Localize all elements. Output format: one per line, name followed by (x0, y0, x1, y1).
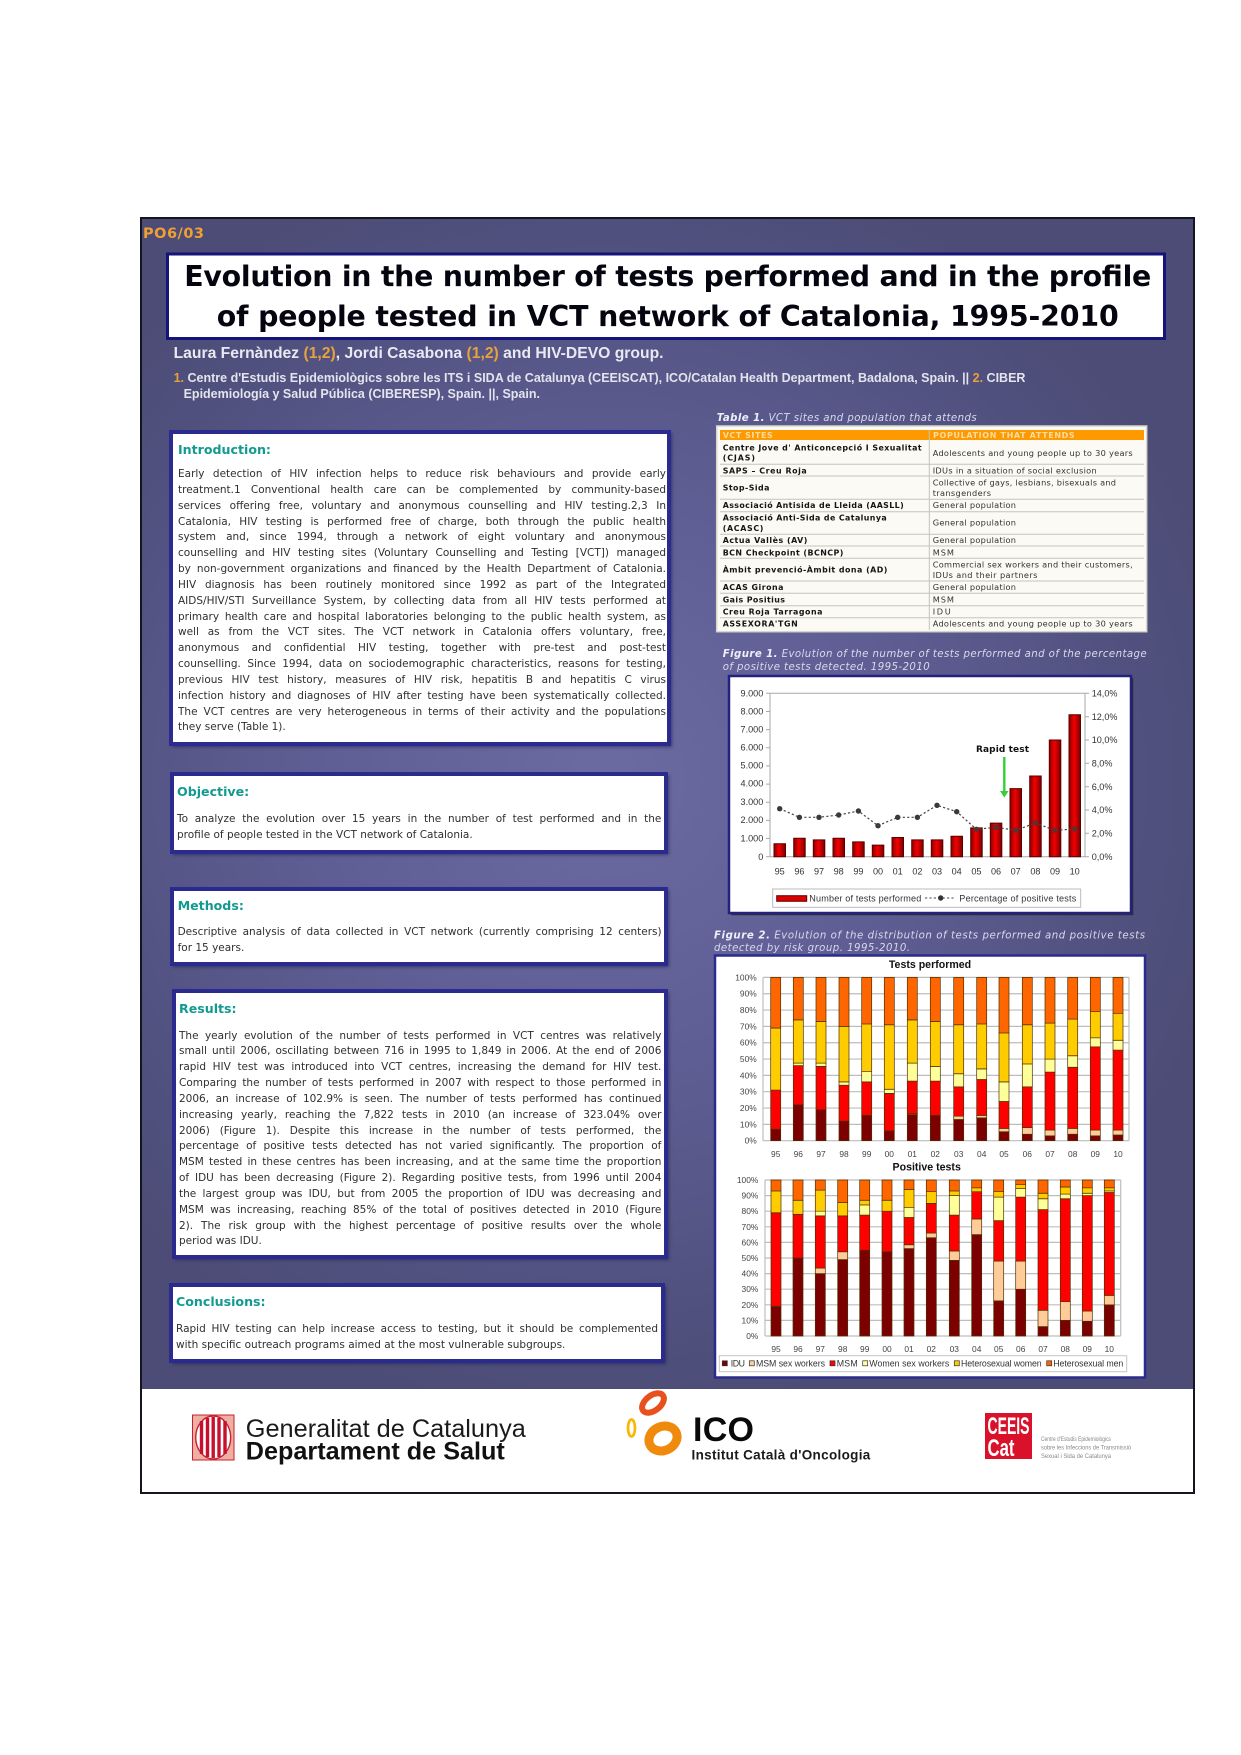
panel: conclusions (170, 1284, 664, 1362)
chart: positive tests: 09 (1083, 1344, 1092, 1354)
panel: methods (171, 888, 667, 965)
chart: tests performed: 80% (740, 1005, 757, 1015)
table rows: MSM (933, 594, 954, 604)
text: introduction body: primary health care and hospital laboratories belonging to the public health system, as (178, 611, 666, 623)
heading: results: Results: (179, 1001, 237, 1016)
title: Evolution in the number of tests performed and in the profile (184, 260, 1151, 293)
chart title: tests performed: Tests performed (889, 959, 971, 971)
chart: positive tests: 01 (904, 1344, 914, 1354)
logo: CEEIS Cat (985, 1413, 1132, 1462)
text: results body: percentage of positive tests detected has not varied significantly. The proportion of (179, 1140, 661, 1152)
right axis labels (1092, 688, 1117, 862)
figure 2 caption: Figure 2. Evolution of the distribution of tests performed and positive tests (714, 930, 1146, 942)
text: introduction body: by non-government organizations and financed by the Health Department of Catalonia. (178, 563, 666, 575)
left axis labels: 9.000 (741, 688, 763, 698)
legend: Percentage of positive tests (959, 893, 1077, 903)
chart: tests performed: 01 (908, 1149, 917, 1159)
year labels: 97 (814, 866, 824, 876)
text: results body: small until 2006, oscillating between 716 in 1995 to 1,849 in 2006. At the end of 2006 (179, 1045, 661, 1057)
chart: positive tests: 30% (742, 1284, 759, 1294)
logo: CEEIS Cat: sobre les Infeccions de Transmissió (1041, 1446, 1132, 1452)
text: introduction body: anonymous and confidential HIV testing, together with pre-test and post-test (178, 642, 666, 654)
chart title: positive tests: Positive tests (893, 1162, 961, 1174)
chart: tests performed: 60% (740, 1038, 757, 1048)
figure 2 caption: detected by risk group. 1995-2010. (714, 943, 910, 954)
figure 1 caption: Figure 1. Evolution of the number of tests performed and of the percentage (723, 649, 1147, 660)
text: conclusions body (176, 1323, 658, 1351)
left axis labels: 2.000 (741, 815, 763, 825)
chart: tests performed: 20% (740, 1103, 757, 1113)
logo: CEEIS Cat: CEEIS (988, 1413, 1030, 1440)
icon: Catalan shield (192, 1415, 234, 1460)
table rows: (CJAS) (723, 454, 755, 463)
chart: positive tests: 60% (742, 1237, 759, 1247)
chart: positive tests: 50% (742, 1253, 759, 1263)
table rows: Centre Jove d' Anticoncepció I Sexualitat (723, 442, 922, 452)
text: introduction body: previous HIV test history, measures of HIV risk, hepatitis B and hepatitis C virus (178, 674, 666, 686)
text: results body: 2006, an increase of 102.9% is seen. The number of tests performed has continued (179, 1093, 661, 1105)
chart: tests performed: 90% (740, 989, 757, 999)
text: introduction body: HIV diagnosis has been routinely monitored since 1992 as part of the Integrated (178, 579, 666, 591)
panel: results (172, 990, 667, 1258)
table rows: (ACASC) (723, 524, 763, 533)
year labels: 06 (991, 866, 1001, 876)
chart: tests performed: 70% (740, 1021, 757, 1031)
chart: positive tests: 00 (882, 1344, 892, 1354)
text: conclusions body: with specific outreach programs aimed at the most vulnerable subgroups. (176, 1339, 565, 1351)
left axis labels: 0 (758, 852, 763, 862)
chart: positive tests: 10% (742, 1315, 759, 1325)
chart: positive tests: 90% (742, 1191, 759, 1201)
chart: positive tests: 10 (1105, 1344, 1114, 1354)
bars: number of tests (774, 715, 1080, 857)
left axis labels: 8.000 (741, 706, 763, 716)
chart: tests performed: 07 (1045, 1149, 1055, 1159)
text: introduction body: well as from the VCT sites. The VCT network in Catalonia offers voluntary, free, (178, 626, 666, 638)
title: of people tested in VCT network of Catalonia, 1995-2010 (217, 300, 1119, 333)
callout: rapid test: Rapid test (976, 745, 1030, 755)
chart: tests performed: 99 (862, 1149, 872, 1159)
left axis labels: 6.000 (741, 742, 763, 752)
year labels: 02 (912, 866, 922, 876)
year labels: 96 (794, 866, 804, 876)
figure 1 caption (723, 649, 1147, 673)
chart: positive tests: 100% (737, 1175, 759, 1185)
text: results body: MSM was increasing, reaching 85% of the total of positives detected in 2010 (Figure (179, 1204, 661, 1216)
table rows: Adolescents and young people up to 30 years (933, 448, 1133, 458)
chart: tests performed: 00 (885, 1149, 894, 1159)
text: introduction body: AIDS/HIV/STI Surveillance System, by collecting data from all HIV tests performed at (178, 595, 666, 607)
table header: POPULATION THAT ATTENDS (933, 431, 1075, 440)
legend: risk groups: Heterosexual women (961, 1358, 1042, 1368)
title (168, 254, 1164, 338)
table rows: Associació Anti-Sida de Catalunya (723, 512, 887, 522)
chart: positive tests: 07 (1038, 1344, 1048, 1354)
right axis labels: 8,0% (1092, 758, 1112, 768)
chart: positive tests: 96 (793, 1344, 803, 1354)
left axis labels: 5.000 (741, 760, 763, 770)
right axis labels: 12,0% (1092, 712, 1117, 722)
line: percentage of positive tests (777, 803, 1077, 833)
chart: tests performed: 03 (954, 1149, 964, 1159)
logo: ICO (628, 1389, 871, 1462)
arrow: rapid test (1000, 757, 1009, 798)
chart: positive tests: 06 (1016, 1344, 1026, 1354)
table rows: General population (933, 500, 1016, 510)
chart: positive tests: 03 (950, 1344, 959, 1354)
table header: VCT SITES (723, 431, 773, 440)
table rows: MSM (933, 547, 954, 557)
poster code: PO6/03 (143, 226, 204, 242)
table rows: General population (933, 582, 1016, 592)
authors: Laura Fernàndez (1,2), Jordi Casabona (1,2) and HIV-DEVO group. (174, 345, 664, 362)
icon: ICO rings (628, 1389, 681, 1456)
text: methods body: Descriptive analysis of data collected in VCT network (currently comprising 12 centers) (178, 926, 662, 938)
logo: CEEIS Cat: Sexual i Sida de Catalunya (1041, 1454, 1112, 1460)
legend: Number of tests performed (809, 893, 921, 903)
text: results body: rapid HIV test was introduced into VCT centres, increasing the demand for HIV test. (179, 1061, 661, 1073)
text: conclusions body: Rapid HIV testing can help increase access to testing, but it should be complemented (176, 1323, 658, 1335)
chart: tests performed: 96 (794, 1149, 803, 1159)
table rows: Actua Vallès (AV) (723, 535, 807, 545)
right axis labels: 0,0% (1092, 852, 1112, 862)
logo: CEEIS Cat: Centre d'Estudis Epidemiològics (1041, 1437, 1111, 1443)
right axis labels: 6,0% (1092, 782, 1112, 792)
chart: positive tests: 40% (742, 1269, 759, 1279)
chart: tests performed: 08 (1068, 1149, 1078, 1159)
year labels: 07 (1011, 866, 1021, 876)
chart: tests performed: 10% (740, 1119, 757, 1129)
heading: methods: Methods: (178, 898, 244, 913)
logo: ICO: ICO (693, 1411, 754, 1449)
chart: positive tests: 05 (994, 1344, 1004, 1354)
table rows: IDUs and their partners (933, 570, 1037, 580)
text: introduction body: Early detection of HIV infection helps to reduce risk behaviours and provide early (178, 468, 666, 480)
chart: positive tests: 08 (1061, 1344, 1070, 1354)
text: results body: of IDU has been decreasing (Figure 2). Regarding positive tests, from 1996 until 2004 (179, 1172, 661, 1184)
text: objective body: profile of people tested in the VCT network of Catalonia. (177, 829, 473, 841)
chart: tests performed: 10 (1113, 1149, 1123, 1159)
year labels: 03 (932, 866, 942, 876)
text: introduction body: services offering free, voluntary and anonymous counselling and HIV testing.2,3 In (178, 500, 666, 512)
left axis labels: 3.000 (741, 797, 763, 807)
table rows (723, 442, 1133, 629)
logo: Generalitat de Catalunya: Departament de Salut (246, 1438, 505, 1466)
legend: risk groups: Women sex workers (869, 1358, 950, 1368)
table rows: ACAS Girona (723, 583, 783, 592)
text: introduction body: The VCT centres are very heterogeneous in terms of their activity and the populations (178, 706, 666, 718)
year labels: 98 (834, 866, 844, 876)
chart: positive tests: 02 (927, 1344, 936, 1354)
chart: positive tests: 97 (816, 1344, 825, 1354)
text: methods body: for 15 years. (178, 942, 244, 954)
table rows: transgenders (933, 488, 991, 498)
text: introduction body: counselling. Since 1994, data on sociodemographic characteristics, reasons for testing, (178, 658, 666, 670)
chart: tests performed: 0% (745, 1136, 757, 1146)
figure 2: stacked bar charts (715, 956, 1145, 1378)
table rows: General population (933, 535, 1016, 545)
text: results body: period was IDU. (179, 1235, 262, 1247)
left axis labels: 7.000 (741, 724, 763, 734)
text: introduction body: treatment.1 Conventional health care can be complemented by community-based (178, 484, 666, 496)
figure 2 caption (714, 930, 1146, 954)
chart: positive tests: 95 (771, 1344, 781, 1354)
text: introduction body: counselling and HIV testing sites (Voluntary Counselling and Testing [VCT]) managed (178, 547, 666, 559)
table rows: ASSEXORA'TGN (723, 620, 798, 629)
chart: positive tests: 20% (742, 1300, 759, 1310)
heading: objective: Objective: (177, 784, 249, 799)
panel: introduction (170, 431, 670, 744)
year labels: 00 (873, 866, 883, 876)
table rows: Commercial sex workers and their customers, (933, 559, 1133, 569)
chart: tests performed: 04 (977, 1149, 987, 1159)
table rows: IDUs in a situation of social exclusion (933, 465, 1097, 475)
logo: Generalitat de Catalunya (192, 1415, 526, 1466)
year labels: 01 (893, 866, 903, 876)
year labels: 08 (1030, 866, 1040, 876)
table rows: Stop-Sida (723, 484, 769, 493)
chart: tests performed: 40% (740, 1070, 757, 1080)
panel: objective (171, 773, 667, 853)
chart: positive tests: 04 (972, 1344, 982, 1354)
year labels (775, 866, 1080, 876)
year labels: 99 (853, 866, 863, 876)
text: results body: MSM tested in these centres has been increasing, and at the same time the proportion (179, 1156, 661, 1168)
text: introduction body: infection history and diagnoses of HIV after testing have been systematically collected. (178, 690, 666, 702)
table rows: Àmbit prevenció-Àmbit dona (AD) (723, 563, 887, 574)
text: results body: The yearly evolution of the number of tests performed in VCT centres was relatively (179, 1030, 661, 1042)
table rows: Adolescents and young people up to 30 years (933, 619, 1133, 629)
table rows: Collective of gays, lesbians, bisexuals and (933, 477, 1116, 487)
affiliations: 1. Centre d'Estudis Epidemiològics sobre les ITS i SIDA de Catalunya (CEEISCAT), ICO/Catalan Health Department, Badalona, Spain. || 2. CIBER (174, 371, 1025, 385)
year labels: 95 (775, 866, 785, 876)
text: objective body (176, 813, 661, 841)
chart: tests performed: 06 (1023, 1149, 1032, 1159)
chart: positive tests: 99 (860, 1344, 870, 1354)
logo: CEEIS Cat: Cat (988, 1435, 1015, 1462)
right axis labels: 14,0% (1092, 688, 1117, 698)
chart: positive tests (737, 1175, 1121, 1354)
table rows: Gais Positius (723, 595, 785, 604)
affiliations: Epidemiología y Salud Pública (CIBERESP), Spain. ||, Spain. (184, 387, 540, 401)
chart: tests performed: 98 (839, 1149, 849, 1159)
year labels: 05 (971, 866, 981, 876)
figure 1: combined chart (729, 676, 1132, 914)
table rows: SAPS – Creu Roja (723, 466, 807, 475)
text: introduction body: they serve (Table 1). (178, 721, 286, 733)
affiliations (174, 371, 1026, 401)
chart: tests performed: 50% (740, 1054, 757, 1064)
chart: positive tests: 80% (742, 1206, 759, 1216)
text: results body: increasing yearly, reaching the 7,822 tests in 2010 (an increase of 323.04% over (179, 1109, 661, 1121)
chart: tests performed: 100% (735, 972, 757, 982)
table rows: General population (933, 517, 1016, 527)
chart: tests performed: 05 (999, 1149, 1009, 1159)
table 1 caption: Table 1. VCT sites and population that attends (717, 413, 977, 424)
right axis labels: 10,0% (1092, 735, 1117, 745)
left axis labels (741, 688, 763, 862)
legend (773, 889, 1081, 907)
text: results body: 2). The risk group with the highest percentage of positive results over the whole (179, 1220, 661, 1232)
text: results body (178, 1030, 662, 1247)
text: results body: the largest group was IDU, but from 2005 the proportion of IDU was decreasing and (179, 1188, 661, 1200)
text: introduction body: system and, since 1994, through a network of eight voluntary and anonymous (178, 531, 666, 543)
chart: tests performed (735, 972, 1129, 1159)
heading: introduction: Introduction: (178, 442, 271, 457)
chart: positive tests: 70% (742, 1222, 759, 1232)
left axis labels: 1.000 (741, 834, 763, 844)
chart: tests performed: 30% (740, 1087, 757, 1097)
text: introduction body: Catalonia, HIV testing is performed free of charge, both through the public health (178, 516, 666, 528)
chart: tests performed: 97 (816, 1149, 826, 1159)
chart: positive tests: 0% (746, 1331, 759, 1341)
table rows: BCN Checkpoint (BCNCP) (723, 548, 843, 557)
chart: tests performed: 02 (931, 1149, 940, 1159)
legend: risk groups (719, 1356, 1127, 1372)
year labels: 09 (1050, 866, 1060, 876)
legend: risk groups: MSM (837, 1358, 858, 1368)
text: introduction body (178, 468, 666, 733)
text: results body: 2006) (Figure 1). Despite this increase in the number of tests performed, the (179, 1125, 661, 1137)
chart: positive tests: 98 (838, 1344, 848, 1354)
legend: risk groups: IDU (731, 1358, 745, 1368)
chart: tests performed: 09 (1091, 1149, 1100, 1159)
logo: Generalitat de Catalunya: Generalitat de Catalunya (246, 1415, 526, 1443)
legend: risk groups: Heterosexual men (1053, 1358, 1123, 1368)
poster frame (140, 217, 1195, 1494)
table header (720, 430, 1144, 440)
table rows: Creu Roja Tarragona (723, 608, 822, 617)
left axis labels: 4.000 (741, 778, 763, 788)
right axis labels: 2,0% (1092, 828, 1112, 838)
text: results body: Comparing the number of tests performed in 2007 with respect to those performed in (179, 1077, 661, 1089)
logo: ICO: Institut Català d'Oncologia (692, 1448, 871, 1462)
figure 1 caption: of positive tests detected. 1995-2010 (723, 662, 930, 673)
right axis labels: 4,0% (1092, 805, 1112, 815)
text: objective body: To analyze the evolution over 15 years in the number of test performed and in the (177, 813, 661, 825)
year labels: 04 (952, 866, 962, 876)
text: methods body (178, 926, 662, 954)
table rows: IDU (933, 607, 951, 617)
table rows: Associació Antisida de Lleida (AASLL) (723, 500, 904, 510)
year labels: 10 (1070, 866, 1080, 876)
table 1 (717, 426, 1147, 632)
chart: tests performed: 95 (771, 1149, 781, 1159)
legend: risk groups: MSM sex workers (756, 1358, 826, 1368)
heading: conclusions: Conclusions: (176, 1294, 266, 1309)
